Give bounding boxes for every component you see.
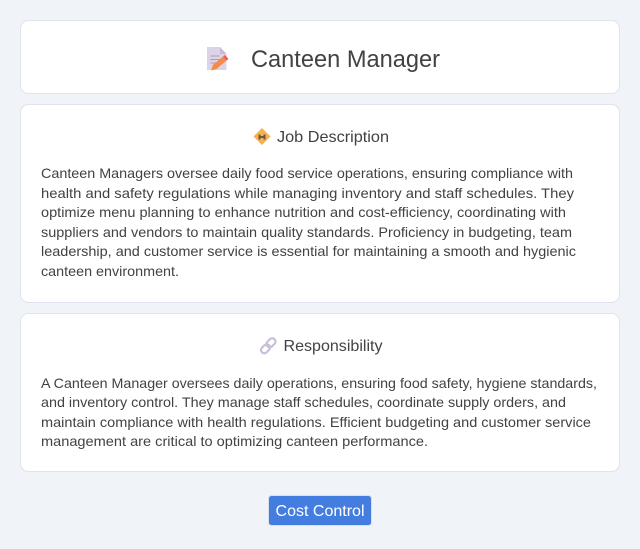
text block: responsibility: A Canteen Manager oversees daily operations, ensuring food safety, hygiene standards, <box>41 375 597 391</box>
text block: job description: Canteen Managers oversee daily food service operations, ensuring compliance with <box>41 165 573 181</box>
text block: job description: canteen environment. <box>41 263 179 279</box>
text block: job description: health and safety regulations while managing inventory and staff schedules. They <box>41 185 574 201</box>
title: Canteen Manager <box>251 46 440 73</box>
text block: responsibility: maintain compliance with health regulations. Efficient budgeting and customer service <box>41 414 591 430</box>
panel: job description <box>20 104 620 302</box>
text block: job description: leadership, and customer service is essential for maintaining a smooth and hygienic <box>41 243 576 259</box>
heading: job description: Job Description <box>277 129 389 146</box>
text block: responsibility <box>41 375 597 449</box>
panel: responsibility <box>20 314 620 472</box>
heading: responsibility: Responsibility <box>284 338 382 355</box>
text block: responsibility: and inventory control. They manage staff schedules, coordinate supply orders, and <box>41 394 566 410</box>
icon: chain link <box>260 337 277 355</box>
text block: job description: optimize menu planning to enhance nutrition and cost-efficiency, coordinating with <box>41 204 566 220</box>
text block: job description: suppliers and vendors to maintain quality standards. Proficiency in budgeting, team <box>41 224 572 240</box>
text block: job description <box>41 165 576 279</box>
tag button: cost control: Cost Control <box>276 503 364 520</box>
text block: responsibility: management are critical to optimizing canteen performance. <box>41 433 428 449</box>
tag button: cost control <box>268 496 372 526</box>
panel: title card <box>20 20 620 94</box>
icon: orange diamond sign <box>254 128 270 145</box>
icon: document with pencil <box>207 47 228 70</box>
